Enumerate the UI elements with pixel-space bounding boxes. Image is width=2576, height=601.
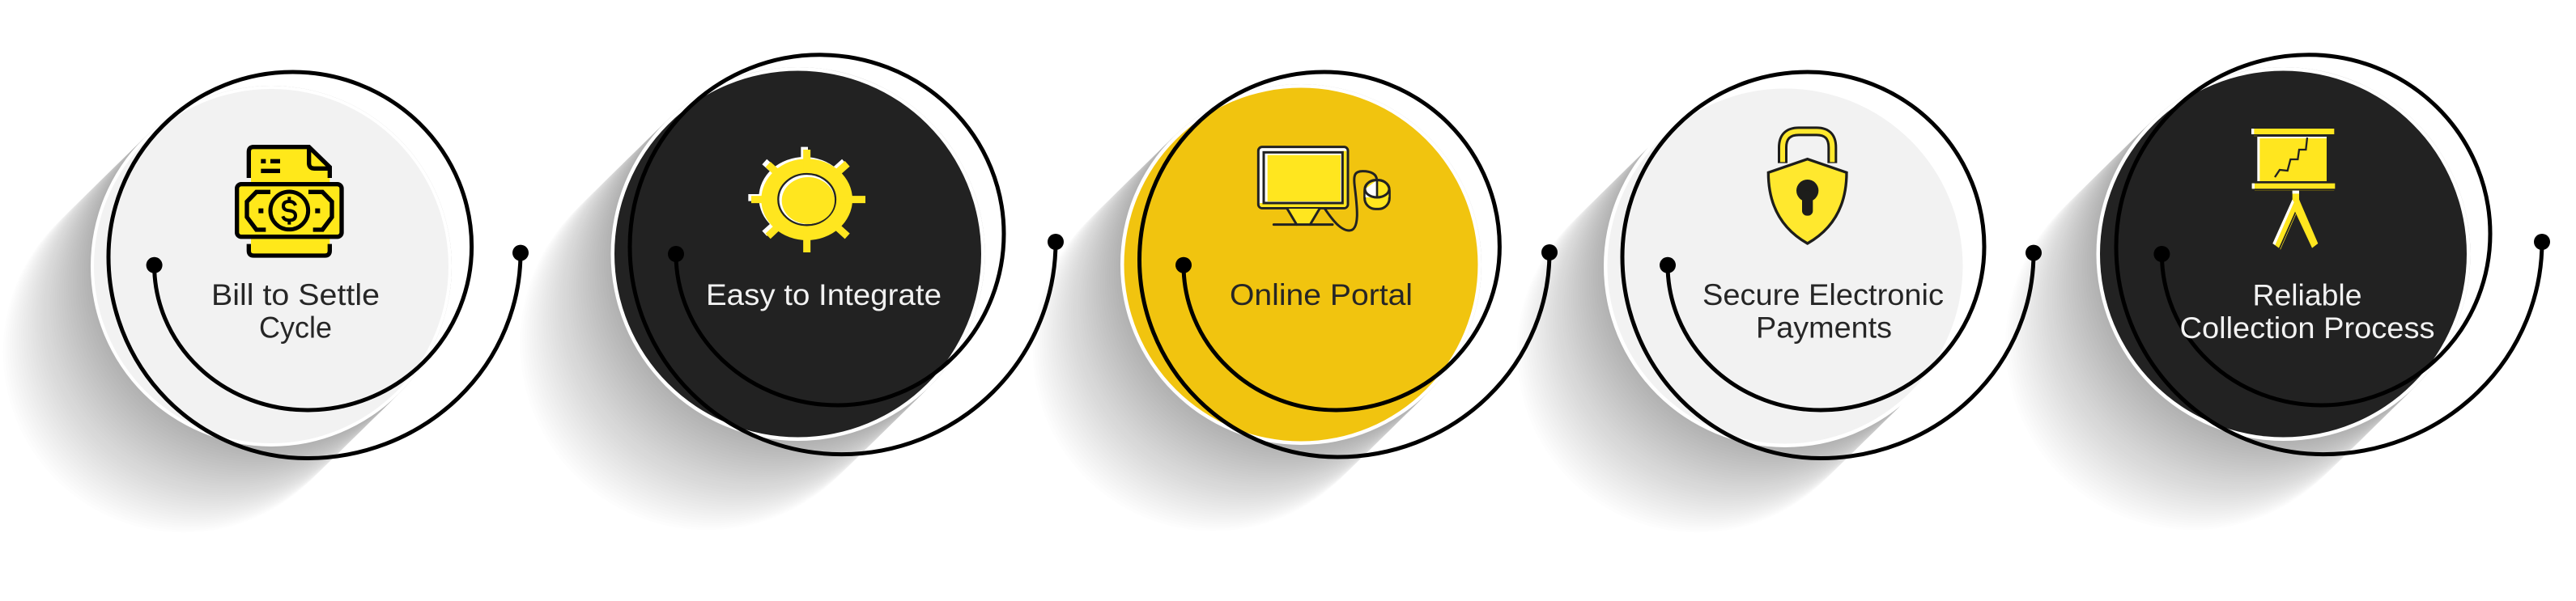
- label: Secure Electronic: [1702, 278, 1944, 311]
- icon: computer and mouse: [1258, 147, 1389, 231]
- icon: gear: [748, 147, 865, 252]
- grey disc: [1608, 89, 1962, 443]
- spiral line: [630, 55, 1056, 455]
- long shadow: step 3: [1033, 84, 1481, 531]
- spiral start dot: [2153, 246, 2170, 262]
- step 4: Secure Electronic Payments: [1604, 72, 2042, 458]
- spiral line: [1622, 72, 2034, 458]
- white disc edge: [91, 86, 452, 447]
- grey disc: [94, 89, 448, 443]
- label: Easy to Integrate: [706, 278, 942, 311]
- step 5: Reliable Collection Process: [2097, 55, 2550, 455]
- long shadow: step 5: [2005, 67, 2471, 530]
- spiral end dot: [1541, 244, 1558, 260]
- long shadows behind the discs: [3, 67, 2471, 532]
- dark disc: [614, 71, 981, 437]
- spiral start dot: [1175, 257, 1192, 273]
- dark disc: [2100, 71, 2467, 437]
- icon: invoice with banknote: [237, 147, 342, 256]
- spiral start dot: [147, 257, 163, 273]
- label: Reliable: [2252, 278, 2362, 312]
- step 2: Easy to Integrate: [610, 55, 1064, 455]
- spiral end dot: [2534, 234, 2550, 250]
- label: Cycle: [259, 311, 332, 345]
- long shadow: step 4: [1517, 86, 1966, 532]
- spiral end dot: [512, 245, 529, 261]
- label: Payments: [1756, 311, 1892, 345]
- label: Online Portal: [1230, 278, 1413, 311]
- label: Collection Process: [2179, 311, 2435, 345]
- white disc edge: [1120, 84, 1481, 445]
- label: Bill to Settle: [211, 278, 380, 311]
- icon: presentation board: [2251, 129, 2335, 249]
- spiral line: [1140, 72, 1549, 457]
- long shadow: step 1: [3, 86, 452, 532]
- label: [2179, 278, 2435, 345]
- label: [211, 278, 380, 345]
- white disc edge: [1604, 85, 1966, 447]
- step 1: Bill to Settle Cycle: [91, 72, 529, 458]
- spiral end dot: [1048, 234, 1064, 250]
- step 3: Online Portal: [1120, 72, 1558, 457]
- spiral start dot: [1660, 257, 1676, 273]
- icon: shield padlock: [1768, 131, 1847, 243]
- long shadow: step 2: [520, 67, 985, 530]
- white disc edge: [610, 67, 984, 441]
- white disc edge: [2097, 67, 2471, 441]
- spiral line: [108, 72, 521, 458]
- spiral start dot: [668, 246, 684, 262]
- spiral end dot: [2026, 245, 2042, 261]
- spiral line: [2116, 55, 2542, 455]
- yellow disc: [1124, 87, 1478, 442]
- label: [1702, 278, 1944, 345]
